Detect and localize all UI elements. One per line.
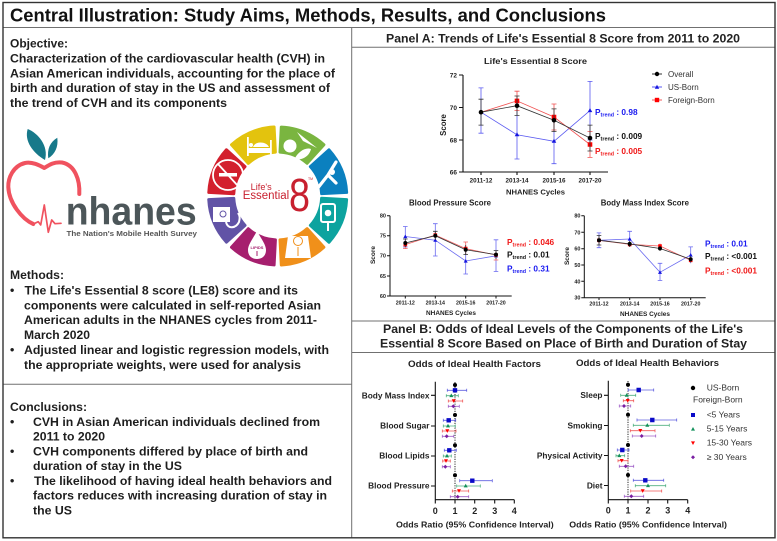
legend: Overall xyxy=(668,70,694,79)
wheel label: Essential xyxy=(243,190,289,202)
p-trend labels: P xyxy=(705,239,711,249)
p-trend labels: : <0.001 xyxy=(724,265,757,275)
y tick labels: 75 xyxy=(380,234,386,240)
x tick labels: 2015-16 xyxy=(650,302,670,308)
legend: <5 Years xyxy=(707,410,740,420)
p-trend labels: P xyxy=(595,146,601,156)
logo: nhanes xyxy=(8,129,197,238)
y tick labels: 50 xyxy=(574,263,580,269)
panel: conclusions: The likelihood of having ideal health behaviors and xyxy=(34,474,332,488)
x tick labels: 2013-14 xyxy=(620,302,639,308)
chart title: Life's Essential 8 Score xyxy=(484,56,587,66)
y tick labels: 66 xyxy=(450,170,457,176)
x axis label: Odds Ratio (95% Confidence Interval) xyxy=(569,519,727,529)
p-trend labels xyxy=(595,107,643,158)
panel: conclusions: duration of stay in the US xyxy=(33,459,182,473)
y axis label: Score xyxy=(370,246,377,264)
y tick labels: 70 xyxy=(574,230,580,236)
p-trend labels: : 0.046 xyxy=(526,237,555,247)
icon: blood pressure cuff xyxy=(214,208,240,227)
chart: life's essential 8 score xyxy=(439,56,715,196)
category labels: Blood Lipids xyxy=(379,451,430,461)
p-trend labels: : 0.009 xyxy=(614,131,643,141)
p-trend labels: trend xyxy=(601,112,614,118)
series: foreign-born xyxy=(597,237,692,262)
x tick labels: 4 xyxy=(685,505,690,515)
series: 5-15 years xyxy=(616,393,669,487)
category labels: Blood Pressure xyxy=(368,481,430,491)
series: overall xyxy=(403,231,498,259)
panel: conclusions: • xyxy=(10,444,14,458)
category labels: Sleep xyxy=(580,390,602,400)
x tick labels: 3 xyxy=(492,506,497,516)
x tick labels: 2011-12 xyxy=(396,300,415,306)
panel: methods: The Life's Essential 8 score (LE8) score and its xyxy=(24,284,298,298)
p-trend labels: trend xyxy=(601,136,614,142)
axes xyxy=(581,216,706,300)
legend: US-Born xyxy=(707,383,740,393)
panel: methods: the appropriate weights, were used for analysis xyxy=(24,358,301,372)
series: foreign-born xyxy=(403,231,498,260)
x axis label: NHANES Cycles xyxy=(426,310,477,317)
series: under 5 years xyxy=(443,388,492,483)
x tick labels: 2017-20 xyxy=(681,302,700,308)
p-trend labels: trend xyxy=(513,269,526,275)
x axis label: NHANES Cycles xyxy=(620,311,671,318)
panel: methods: March 2020 xyxy=(24,328,90,342)
panel: conclusions: 2011 to 2020 xyxy=(33,430,105,444)
x tick labels: 0 xyxy=(606,505,611,515)
p-trend labels: trend xyxy=(601,152,614,158)
y tick labels: 80 xyxy=(380,214,386,220)
y axis label: Score xyxy=(564,247,571,265)
x tick labels: 2017-20 xyxy=(578,178,602,185)
y tick labels xyxy=(574,214,580,302)
wheel label xyxy=(243,169,313,221)
x tick labels: 1 xyxy=(625,505,631,515)
panel: methods: Methods: xyxy=(10,268,64,282)
chart title: Odds of Ideal Health Behaviors xyxy=(576,358,719,368)
x axis label: NHANES Cycles xyxy=(506,188,565,196)
p-trend labels: P xyxy=(507,237,513,247)
y axis label: Score xyxy=(439,114,448,136)
x tick labels xyxy=(396,300,506,306)
icon: lipids drop: LIPIDS xyxy=(251,245,264,250)
title: Central Illustration: Study Aims, Methods, Results, and Conclusions xyxy=(10,4,606,26)
y tick labels: 80 xyxy=(574,214,580,220)
x tick labels: 0 xyxy=(433,506,438,516)
p-trend labels: : 0.98 xyxy=(614,107,638,117)
wheel label: Life's xyxy=(251,182,272,192)
series: 30 or more years xyxy=(442,404,469,499)
panel: conclusions xyxy=(10,400,332,518)
icon: food xyxy=(284,132,317,160)
category labels: Body Mass Index xyxy=(362,390,430,400)
x tick labels: 2 xyxy=(472,506,477,516)
x tick labels: 2015-16 xyxy=(542,178,566,185)
p-trend labels xyxy=(705,239,757,277)
series: under 5 years xyxy=(617,388,677,482)
panel: conclusions: factors reduces with increasing duration of stay in xyxy=(33,488,327,502)
panel: objective xyxy=(10,36,336,110)
icon: bed xyxy=(247,137,272,156)
icon: stretching figure xyxy=(317,162,336,189)
chart: blood pressure score xyxy=(370,199,555,317)
y tick labels: 30 xyxy=(574,296,580,302)
nhanes tagline: The Nation's Mobile Health Survey xyxy=(66,231,197,238)
x tick labels: 2011-12 xyxy=(589,302,609,308)
panel: conclusions: Conclusions: xyxy=(10,400,87,414)
heading: panel B xyxy=(380,322,747,350)
p-trend labels: : <0.001 xyxy=(724,251,757,261)
panel: objective: Characterization of the cardiovascular health (CVH) in xyxy=(10,52,325,66)
category labels: Blood Sugar xyxy=(380,421,430,431)
series: US-born reference xyxy=(626,383,630,477)
panel: conclusions: CVH components differed by place of birth and xyxy=(33,444,308,458)
series: overall xyxy=(478,96,592,151)
x tick labels xyxy=(433,506,517,516)
series: 15-30 years xyxy=(442,399,469,493)
series: 30 or more years xyxy=(619,404,656,498)
legend: Foreign-Born xyxy=(693,395,743,405)
panel: methods: American adults in the NHANES cycles from 2011- xyxy=(24,313,317,327)
icon: glucose meter xyxy=(321,204,335,231)
axes xyxy=(431,382,514,504)
x tick labels: 2017-20 xyxy=(486,300,506,306)
icon: life's essential 8 wheel xyxy=(196,115,359,277)
series: overall xyxy=(597,236,693,262)
icon: apple outline xyxy=(8,162,79,224)
p-trend labels: P xyxy=(507,264,513,274)
panel: conclusions: • xyxy=(10,415,14,429)
category labels xyxy=(537,390,603,490)
p-trend labels: P xyxy=(705,251,711,261)
legend: 5-15 Years xyxy=(707,424,747,434)
y tick labels xyxy=(450,72,457,176)
p-trend labels: : 0.01 xyxy=(526,250,550,260)
series: US-born xyxy=(478,81,592,164)
heading: panel B: Essential 8 Score Based on Place of Birth and Duration of Stay xyxy=(380,336,747,350)
heading: panel B: Panel B: Odds of Ideal Levels of the Components of the Life's xyxy=(383,322,743,336)
legend: US-Born xyxy=(668,83,699,92)
p-trend labels: P xyxy=(507,250,513,260)
panel: conclusions: CVH in Asian American individuals declined from xyxy=(33,415,320,429)
legend: Foreign-Born xyxy=(668,96,715,105)
chart title: Odds of Ideal Health Factors xyxy=(408,359,541,369)
y tick labels: 60 xyxy=(574,247,580,253)
p-trend labels: trend xyxy=(711,271,724,277)
panel: methods: Adjusted linear and logistic regression models, with xyxy=(24,343,329,357)
p-trend labels: P xyxy=(595,107,601,117)
chart: odds of ideal health behaviors xyxy=(537,358,752,529)
y tick labels: 60 xyxy=(380,294,386,300)
panel: methods: • xyxy=(10,284,14,298)
x tick labels: 2 xyxy=(645,505,651,515)
legend: ≥ 30 Years xyxy=(707,452,747,462)
p-trend labels: trend xyxy=(513,255,526,261)
x tick labels: 2011-12 xyxy=(470,178,493,185)
x tick labels: 3 xyxy=(665,505,670,515)
y tick labels: 65 xyxy=(380,274,386,280)
x tick labels: 1 xyxy=(452,506,458,516)
series: US-born xyxy=(597,231,693,280)
panel: objective: Asian American individuals, accounting for the place of xyxy=(10,66,336,80)
x tick labels xyxy=(606,505,690,515)
axes xyxy=(387,216,512,298)
p-trend labels: P xyxy=(595,131,601,141)
series: foreign-born xyxy=(481,91,592,157)
panel: objective: birth and duration of stay in the US and assessment of xyxy=(10,81,331,95)
axes xyxy=(604,381,688,504)
x tick labels xyxy=(589,302,700,308)
series: US-born reference xyxy=(453,383,457,477)
legend xyxy=(691,383,752,462)
p-trend labels: : 0.01 xyxy=(724,239,748,249)
x tick labels xyxy=(470,178,602,185)
wheel label: TM xyxy=(308,177,313,181)
y tick labels: 40 xyxy=(574,279,580,285)
y tick labels: 70 xyxy=(380,254,386,260)
heading: panel A: Panel A: Trends of Life's Essential 8 Score from 2011 to 2020 xyxy=(386,32,740,46)
x axis label: Odds Ratio (95% Confidence Interval) xyxy=(396,520,554,530)
x tick labels: 2013-14 xyxy=(426,300,445,306)
panel: methods: • xyxy=(10,343,14,357)
p-trend labels: P xyxy=(705,265,711,275)
category labels: Diet xyxy=(587,480,603,490)
y tick labels: 72 xyxy=(450,72,457,80)
p-trend labels: trend xyxy=(711,256,724,262)
axes xyxy=(459,75,608,175)
chart: body mass index score xyxy=(564,199,757,318)
chart title: Body Mass Index Score xyxy=(601,199,689,208)
reference line xyxy=(627,381,629,500)
y tick labels xyxy=(380,214,386,300)
series: 15-30 years xyxy=(618,399,662,493)
p-trend labels xyxy=(507,237,555,275)
x tick labels: 2013-14 xyxy=(505,178,529,185)
panel: methods: components were calculated in self-reported Asian xyxy=(24,298,321,312)
category labels xyxy=(362,390,430,491)
nhanes wordmark: nhanes xyxy=(66,190,197,234)
chart: odds of ideal health factors xyxy=(362,359,554,530)
p-trend labels: : 0.31 xyxy=(526,264,550,274)
y tick labels: 70 xyxy=(450,105,457,112)
wheel label: 8 xyxy=(289,169,310,221)
icon: apple leaves xyxy=(27,129,58,160)
p-trend labels: : 0.005 xyxy=(614,146,643,156)
reference line xyxy=(454,382,456,500)
panel: conclusions: • xyxy=(10,474,14,488)
legend xyxy=(652,70,715,105)
y tick labels: 68 xyxy=(450,138,457,144)
x tick labels: 4 xyxy=(512,506,517,516)
icon: lipids drop xyxy=(248,231,266,259)
x tick labels: 2015-16 xyxy=(456,300,475,306)
icon: no smoking xyxy=(213,160,243,190)
p-trend labels: trend xyxy=(513,242,526,248)
category labels: Smoking xyxy=(567,420,602,430)
panel: objective: Objective: xyxy=(10,36,68,50)
icon: pulse line xyxy=(33,205,61,232)
series: 5-15 years xyxy=(443,394,480,488)
series: US-born xyxy=(403,224,498,274)
legend: 15-30 Years xyxy=(707,438,752,448)
p-trend labels: trend xyxy=(711,244,724,250)
panel: methods xyxy=(10,268,329,372)
panel: objective: the trend of CVH and its components xyxy=(10,96,227,110)
category labels: Physical Activity xyxy=(537,450,603,460)
panel: conclusions: the US xyxy=(33,504,72,518)
icon: weight scale xyxy=(285,236,311,258)
chart title: Blood Pressure Score xyxy=(409,199,491,208)
